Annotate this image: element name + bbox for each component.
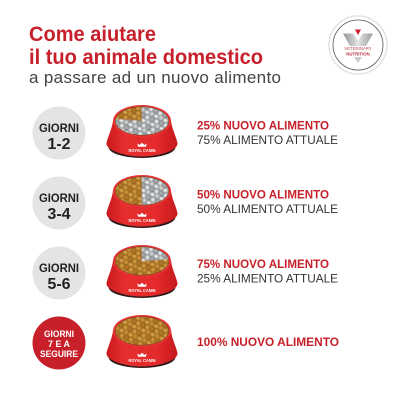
title: Come aiutare	[29, 23, 156, 46]
badge: giorni 7 e a seguire: SEGUIRE	[40, 349, 78, 360]
text: proportions: 100% NUOVO ALIMENTO	[197, 335, 339, 349]
row 4: days 7 onward	[32, 314, 339, 370]
badge: giorni 1-2: 1-2	[48, 136, 71, 153]
bowl: 75% new food: ROYAL CANIN	[128, 288, 156, 293]
badge: giorni 7 e a seguire	[32, 316, 86, 370]
badge: giorni 3-4: 3-4	[48, 206, 71, 223]
badge: giorni 7 e a seguire: 7 E A	[48, 339, 70, 350]
text: proportions	[197, 188, 338, 216]
logo: veterinary nutrition badge: NUTRITION	[346, 52, 370, 56]
bowl: 50% new food	[106, 174, 178, 228]
bowl: 25% new food	[106, 104, 178, 158]
text: proportions: 75% NUOVO ALIMENTO	[197, 257, 329, 271]
text: proportions	[197, 257, 338, 286]
bowl: 100% new food	[106, 314, 178, 368]
bowl: 25% new food: ROYAL CANIN	[128, 148, 156, 153]
bowl: 100% new food: ROYAL CANIN	[128, 358, 156, 363]
title: il tuo animale domestico	[29, 46, 263, 69]
logo: veterinary nutrition badge	[329, 16, 387, 74]
bowl: 50% new food: ROYAL CANIN	[128, 218, 156, 223]
text: proportions: 25% NUOVO ALIMENTO	[197, 118, 329, 132]
row 2: days 3-4	[32, 174, 338, 230]
badge: giorni 5-6: GIORNI	[39, 261, 79, 275]
subtitle: a passare ad un nuovo alimento	[29, 68, 281, 87]
logo: veterinary nutrition badge: VETERINARY	[344, 46, 372, 51]
text: proportions	[197, 118, 338, 147]
badge: giorni 5-6	[32, 246, 86, 300]
badge: giorni 1-2: GIORNI	[39, 121, 79, 135]
row 1: days 1-2	[32, 104, 338, 160]
badge: giorni 7 e a seguire: GIORNI	[44, 329, 74, 340]
badge: giorni 5-6: 5-6	[48, 276, 71, 293]
badge: giorni 3-4: GIORNI	[39, 191, 79, 205]
title	[29, 23, 263, 69]
row 3: days 5-6	[32, 244, 338, 300]
text: proportions: 50% ALIMENTO ATTUALE	[197, 202, 338, 216]
text: proportions: 75% ALIMENTO ATTUALE	[197, 133, 338, 147]
badge: giorni 3-4	[32, 176, 86, 230]
bowl: 75% new food	[106, 244, 178, 298]
badge: giorni 1-2	[32, 106, 86, 160]
text: proportions: 25% ALIMENTO ATTUALE	[197, 272, 338, 286]
text: proportions: 50% NUOVO ALIMENTO	[197, 188, 329, 202]
